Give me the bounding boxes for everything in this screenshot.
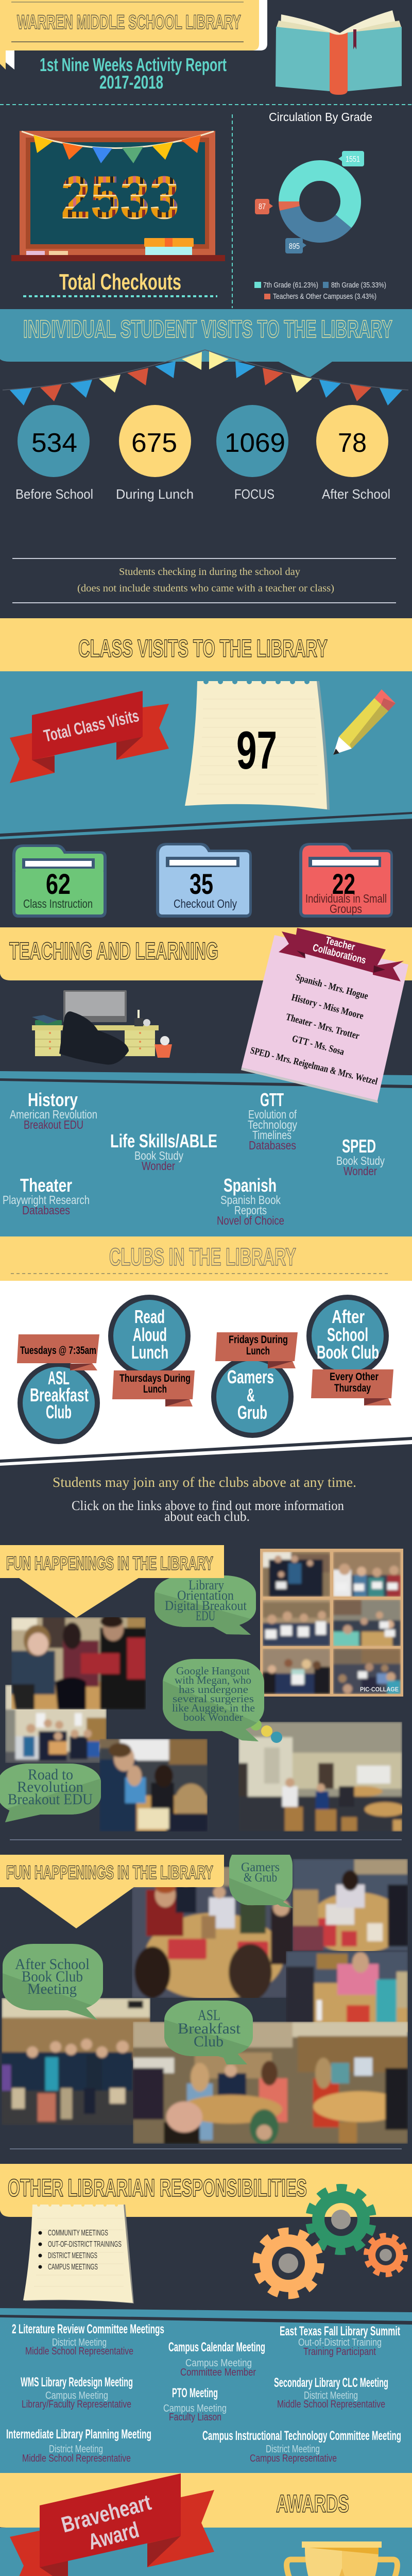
life skills: Life Skills/ABLE xyxy=(110,1130,217,1151)
meeting: wms library redesign: Campus Meeting xyxy=(45,2390,108,2401)
icon: open book xyxy=(276,10,402,95)
meeting: campus calendar: Campus Calendar Meeting xyxy=(168,2340,265,2354)
photo: gamers and grub table xyxy=(132,1867,293,1998)
bubble: google hangout: book Wonder xyxy=(183,1711,243,1723)
bubble: google hangout: with Megan, who xyxy=(175,1674,251,1686)
club: gamers and grub: Fridays During xyxy=(229,1334,288,1346)
club: gamers and grub: Gamers xyxy=(227,1366,274,1387)
bubble: gamers and grub xyxy=(229,1855,293,1908)
stat: before school xyxy=(15,405,93,502)
panel: awards xyxy=(0,2473,412,2576)
gtt xyxy=(248,1089,297,1152)
stat: during lunch: 675 xyxy=(131,428,177,458)
bubble: library orientation: Orientation xyxy=(177,1588,234,1603)
photo: google hangout in library xyxy=(238,1722,402,1832)
bubble: road to revolution: Breakout EDU xyxy=(8,1791,93,1808)
bubble: road to revolution: Revolution xyxy=(17,1778,83,1795)
spanish: Spanish Book xyxy=(220,1193,281,1207)
panel: teaching and learning list xyxy=(0,1071,412,1236)
note: responsibilities list: COMMUNITY MEETINGS xyxy=(48,2229,108,2238)
icon: green gear xyxy=(304,2182,378,2257)
bunting xyxy=(22,131,214,163)
life skills xyxy=(110,1130,217,1173)
meeting: secondary library clc: District Meeting xyxy=(304,2390,358,2401)
theater xyxy=(3,1175,90,1217)
spanish: Novel of Choice xyxy=(217,1214,284,1227)
life skills: Wonder xyxy=(142,1159,175,1173)
club: read aloud lunch: Lunch xyxy=(131,1342,168,1363)
meeting: pto: Faculty Liason xyxy=(169,2412,221,2423)
folder: checkout only: 35 xyxy=(190,868,213,900)
chart legend: Teachers & Other Campuses (3.43%) xyxy=(273,292,376,301)
stat: before school: Before School xyxy=(15,486,93,502)
photo: students at table xyxy=(99,1739,208,1832)
photo: after school book club group xyxy=(2,1998,150,2125)
meeting: pto: Campus Meeting xyxy=(163,2403,227,2414)
bubble: after school book club xyxy=(0,1942,106,2022)
spanish: Reports xyxy=(234,1204,267,1217)
club: gamers and grub: & xyxy=(247,1384,255,1405)
folder: class instruction xyxy=(12,844,107,918)
panel: fun happenings heading 1 xyxy=(0,1545,224,1618)
folder: individuals in small groups: Individuals in Small xyxy=(305,892,387,905)
photo: student smiling at table xyxy=(286,1951,408,2032)
club: read aloud lunch: Read xyxy=(134,1306,165,1327)
label 1551: 1551 xyxy=(346,155,360,164)
bubble: road to revolution xyxy=(0,1762,106,1824)
meeting: literature review: Middle School Representative xyxy=(25,2346,133,2357)
club: after school book club: Thursday xyxy=(334,1382,371,1394)
gtt: Databases xyxy=(249,1139,296,1152)
collaborators list xyxy=(249,972,379,1087)
bubble: library orientation: Digital Breakout xyxy=(165,1598,247,1613)
club: gamers and grub: Lunch xyxy=(246,1345,270,1357)
collaborators list: GTT - Ms. Sosa xyxy=(291,1033,346,1058)
clubs note: about each club. xyxy=(164,1509,250,1524)
meeting: intermediate library planning: District Meeting xyxy=(49,2444,103,2455)
meeting: secondary library clc: Middle School Representative xyxy=(277,2399,385,2410)
meeting: pto xyxy=(163,2386,227,2423)
note: students checking in: Students checking in during the school day xyxy=(119,566,300,578)
panel: fun happenings heading 2: FUN HAPPENINGS IN THE LIBRARY xyxy=(6,1862,213,1883)
gtt: Evolution of xyxy=(248,1108,297,1121)
folder: checkout only xyxy=(156,843,252,918)
bubble: after school book club: Meeting xyxy=(27,1980,77,1997)
header banner xyxy=(0,0,267,70)
spanish: Spanish xyxy=(224,1175,277,1196)
title: WARREN MIDDLE SCHOOL LIBRARY xyxy=(17,11,241,33)
club: gamers and grub xyxy=(211,1332,298,1438)
meeting: wms library redesign xyxy=(21,2375,133,2410)
gtt: Timelines xyxy=(252,1128,291,1142)
meeting: secondary library clc xyxy=(274,2376,388,2410)
bubble: library orientation xyxy=(154,1575,256,1635)
bubble: after school book club: After School xyxy=(15,1956,90,1973)
history: History xyxy=(28,1089,78,1110)
meeting: campus calendar: Campus Meeting xyxy=(185,2358,252,2369)
photo: asl breakfast club room xyxy=(133,2022,408,2144)
club: after school book club: Book Club xyxy=(317,1342,379,1363)
number 2533: 2533 xyxy=(61,164,179,232)
meeting: pto: PTO Meeting xyxy=(172,2386,218,2400)
life skills: Book Study xyxy=(134,1149,183,1162)
total checkouts label: Total Checkouts xyxy=(59,269,181,295)
collaborators list: History - Miss Moore xyxy=(290,992,365,1022)
clubs note: Click on the links above to find out more information xyxy=(72,1498,344,1513)
collaborators list: SPED - Mrs. Reigelman & Mrs. Wetzel xyxy=(249,1045,379,1087)
club: asl breakfast: Tuesdays @ 7:35am xyxy=(20,1345,96,1357)
theater: Databases xyxy=(22,1204,70,1217)
note paper: 97: 97 xyxy=(236,721,277,781)
club: read aloud lunch xyxy=(108,1295,195,1406)
chart legend: 8th Grade (35.33%) xyxy=(331,281,386,290)
meeting: campus instructional technology: District Meeting xyxy=(266,2444,320,2455)
stat: after school xyxy=(316,405,390,502)
icon: pencil xyxy=(333,689,396,755)
bubble: google hangout: Google Hangout xyxy=(176,1665,250,1677)
folder: class instruction: Class Instruction xyxy=(23,897,93,910)
meeting: literature review xyxy=(12,2322,164,2357)
club: gamers and grub: Grub xyxy=(237,1402,267,1423)
ribbon: total class visits xyxy=(10,691,169,783)
chart title: Circulation By Grade xyxy=(269,110,372,124)
bubble: gamers and grub: & Grub xyxy=(244,1871,277,1885)
heading: AWARDS xyxy=(276,2490,349,2518)
bubble: asl breakfast club: ASL xyxy=(198,2007,220,2024)
club: after school book club: School xyxy=(327,1324,368,1345)
clubs note xyxy=(53,1475,356,1524)
bubble: gamers and grub: Gamers xyxy=(241,1860,280,1874)
collaborators list: Theater - Mrs. Trotter xyxy=(285,1012,361,1042)
clubs note: Students may join any of the clubs above at any time. xyxy=(53,1475,356,1490)
ribbon: Collaborations xyxy=(312,942,367,966)
collaborators list: Spanish - Mrs. Hogue xyxy=(295,972,369,1002)
note: responsibilities list: OUT-OF-DISTRICT TRAININGS xyxy=(48,2240,122,2249)
bubble: asl breakfast club: Club xyxy=(194,2033,224,2050)
chalkboard: total checkouts xyxy=(11,131,225,261)
divider xyxy=(0,104,412,105)
panel: teaching and learning heading xyxy=(0,927,412,980)
sped: Wonder xyxy=(344,1164,377,1178)
meeting: campus calendar: Committee Member xyxy=(180,2367,256,2378)
donut chart xyxy=(255,151,364,253)
panel: meetings xyxy=(0,2308,412,2473)
meeting: east texas summit: Training Participant xyxy=(303,2346,376,2358)
photo: board game table xyxy=(293,1859,408,1951)
bubble: google hangout xyxy=(163,1659,264,1741)
ribbon: braveheart award xyxy=(10,2473,214,2576)
meeting: intermediate library planning xyxy=(6,2427,151,2464)
panel: class visits xyxy=(0,671,412,839)
spanish xyxy=(217,1175,284,1227)
subtitle: 1st Nine Weeks Activity Report xyxy=(40,54,227,75)
bunting xyxy=(3,350,408,405)
photo: students with breakout box xyxy=(11,1617,146,1709)
panel: fun happenings heading 1: FUN HAPPENINGS IN THE LIBRARY xyxy=(6,1553,213,1574)
club: asl breakfast: ASL xyxy=(48,1367,70,1388)
bubble: after school book club: Book Club xyxy=(22,1968,83,1985)
panel: individual student visits banner xyxy=(0,309,412,378)
bubble: google hangout: has undergone xyxy=(179,1683,248,1696)
ribbon xyxy=(279,928,404,981)
ribbon: Teacher xyxy=(324,935,356,953)
note: responsibilities list xyxy=(23,2204,134,2303)
folder: individuals in small groups xyxy=(299,843,393,918)
bubble: road to revolution: Road to xyxy=(28,1766,73,1783)
theater: Theater xyxy=(20,1175,72,1196)
bubble: google hangout: like Auggie, in the xyxy=(172,1702,255,1714)
stat: before school: 534 xyxy=(31,428,77,458)
club: asl breakfast: Club xyxy=(46,1401,72,1422)
theater: Playwright Research xyxy=(3,1193,90,1207)
note: students checking in xyxy=(77,566,334,594)
ribbon: braveheart award: Award xyxy=(85,2517,142,2555)
decorative pom poms xyxy=(250,1719,282,1743)
photo: road to revolution group xyxy=(5,1685,107,1763)
eraser xyxy=(144,238,194,255)
history xyxy=(10,1089,97,1131)
meeting: intermediate library planning: Middle School Representative xyxy=(22,2453,131,2464)
chart legend xyxy=(254,281,386,301)
meeting: literature review: 2 Literature Review Committee Meetings xyxy=(12,2322,164,2336)
icon: small gear xyxy=(366,2235,405,2275)
club: read aloud lunch: Thursdays During xyxy=(119,1372,191,1384)
folder: class instruction: 62 xyxy=(46,868,71,900)
club: asl breakfast: Breakfast xyxy=(30,1384,89,1405)
panel: fun happenings heading 2 xyxy=(0,1855,224,1928)
club: asl breakfast xyxy=(17,1334,100,1444)
folder: individuals in small groups: 22 xyxy=(332,868,355,900)
bubble: google hangout: several surgeries xyxy=(173,1692,254,1705)
illustration: desk and chair xyxy=(32,990,172,1064)
club: after school book club xyxy=(306,1295,393,1405)
bubble: asl breakfast club: Breakfast xyxy=(178,2020,241,2037)
note: responsibilities list: DISTRICT MEETINGS xyxy=(48,2251,97,2260)
panel: class visits heading xyxy=(0,618,412,671)
meeting: wms library redesign: WMS Library Redesign Meeting xyxy=(21,2375,133,2389)
sped: Book Study xyxy=(336,1154,385,1167)
photo collage: library orientation xyxy=(260,1549,403,1697)
note: students checking in: (does not include students who came with a teacher or class) xyxy=(77,583,334,594)
panel: clubs xyxy=(0,1281,412,1466)
club: after school book club: Every Other xyxy=(330,1371,379,1383)
club: after school book club: After xyxy=(332,1306,365,1327)
label 895 xyxy=(285,238,306,253)
subtitle: 2017-2018 xyxy=(99,72,163,93)
note paper: 97 xyxy=(185,679,330,810)
bubble: library orientation: Library xyxy=(188,1578,224,1592)
bubble: asl breakfast club xyxy=(162,1999,255,2066)
stat: focus: FOCUS xyxy=(234,486,274,502)
history: Breakout EDU xyxy=(24,1118,83,1131)
stat: during lunch: During Lunch xyxy=(116,486,194,502)
note: teacher collaborations xyxy=(241,928,408,1103)
note: responsibilities list: CAMPUS MEETINGS xyxy=(48,2263,98,2272)
icon: trophy xyxy=(287,2541,397,2576)
panel: clubs heading xyxy=(0,1236,412,1281)
meeting: campus calendar xyxy=(168,2340,265,2378)
panel: other librarian responsibilities heading xyxy=(0,2164,412,2217)
club: read aloud lunch: Aloud xyxy=(133,1324,167,1345)
stat: focus xyxy=(216,405,288,502)
meeting: campus instructional technology: Campus Representative xyxy=(250,2453,337,2464)
history: American Revolution xyxy=(10,1108,97,1121)
stat: focus: 1069 xyxy=(225,428,285,458)
sped: SPED xyxy=(342,1136,376,1157)
meeting: campus instructional technology xyxy=(202,2429,401,2464)
subtitle xyxy=(40,54,227,93)
label 87: 87 xyxy=(259,202,266,211)
meeting: east texas summit: Out-of-District Training xyxy=(298,2337,382,2348)
gtt: GTT xyxy=(260,1089,284,1110)
panel: clubs heading: CLUBS IN THE LIBRARY xyxy=(109,1244,296,1271)
sped xyxy=(336,1136,385,1178)
icon: orange gear xyxy=(256,2231,320,2295)
club: read aloud lunch: Lunch xyxy=(143,1383,167,1395)
meeting: literature review: District Meeting xyxy=(52,2337,107,2348)
meeting: east texas summit xyxy=(280,2324,400,2358)
meeting: wms library redesign: Library/Faculty Representative xyxy=(22,2399,131,2410)
stat: after school: After School xyxy=(322,486,390,502)
ribbon: braveheart award: Braveheart xyxy=(59,2490,154,2538)
ribbon: total class visits: Total Class Visits xyxy=(42,706,141,745)
label 87 xyxy=(255,199,273,214)
bubble: library orientation: EDU xyxy=(196,1608,215,1623)
folder: checkout only: Checkout Only xyxy=(174,897,237,910)
label 1551 xyxy=(338,151,364,166)
stat: after school: 78 xyxy=(338,428,367,458)
chart legend: 7th Grade (61.23%) xyxy=(263,281,318,290)
panel: teaching and learning heading: TEACHING AND LEARNING xyxy=(9,937,218,964)
meeting: intermediate library planning: Intermediate Library Planning Meeting xyxy=(6,2427,151,2442)
stat: during lunch xyxy=(116,405,194,502)
label 895: 895 xyxy=(289,242,300,251)
gtt: Technology xyxy=(248,1118,297,1131)
folder: individuals in small groups: Groups xyxy=(330,902,362,916)
